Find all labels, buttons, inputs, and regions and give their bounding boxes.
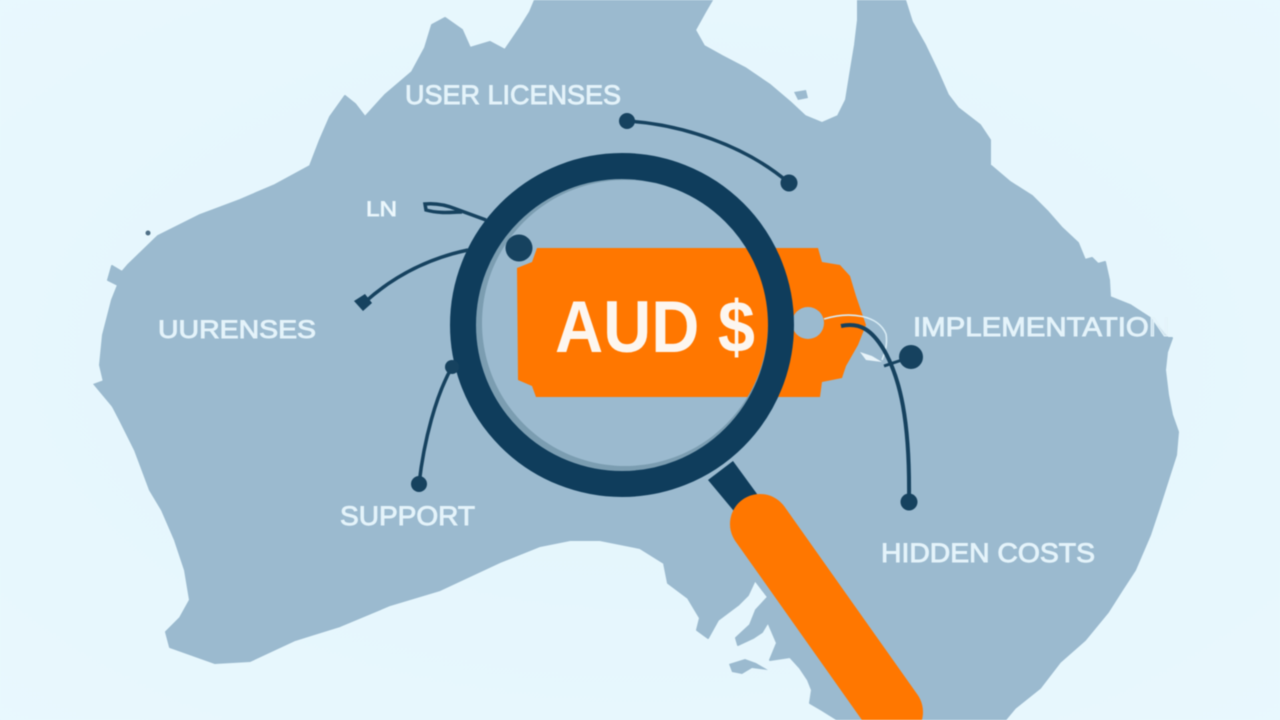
connector: left licenses	[354, 250, 468, 311]
tag hole	[792, 307, 824, 339]
lens inner ring	[467, 170, 777, 480]
lens rim	[463, 166, 781, 484]
Tasmania-like island	[729, 659, 768, 674]
tiny west island	[146, 230, 150, 236]
AUD price text: AUD $	[555, 287, 755, 368]
connector: user licenses	[619, 113, 798, 192]
label: implementation: IMPLEMENTATIO N	[913, 312, 1170, 342]
connector: dot inside lens	[506, 234, 532, 262]
connector: implementation and hidden costs	[841, 325, 923, 510]
label: fragment: LN	[366, 198, 397, 221]
connector: upper left loop	[425, 204, 486, 220]
label: user licenses: USER LICENSES	[405, 80, 621, 110]
price tag	[517, 248, 887, 397]
label: support: SUPPORT	[340, 501, 475, 531]
label: licenses left: UURENSES	[158, 316, 316, 344]
handle neck	[708, 461, 760, 516]
label: hidden costs: HIDDEN COSTS	[881, 538, 1095, 568]
magnifying glass	[463, 166, 893, 712]
tag string	[824, 315, 887, 360]
small north island	[794, 90, 808, 100]
Shark Bay inlet peninsula	[93, 380, 122, 410]
orange handle	[760, 524, 893, 712]
connector: support	[411, 360, 459, 492]
